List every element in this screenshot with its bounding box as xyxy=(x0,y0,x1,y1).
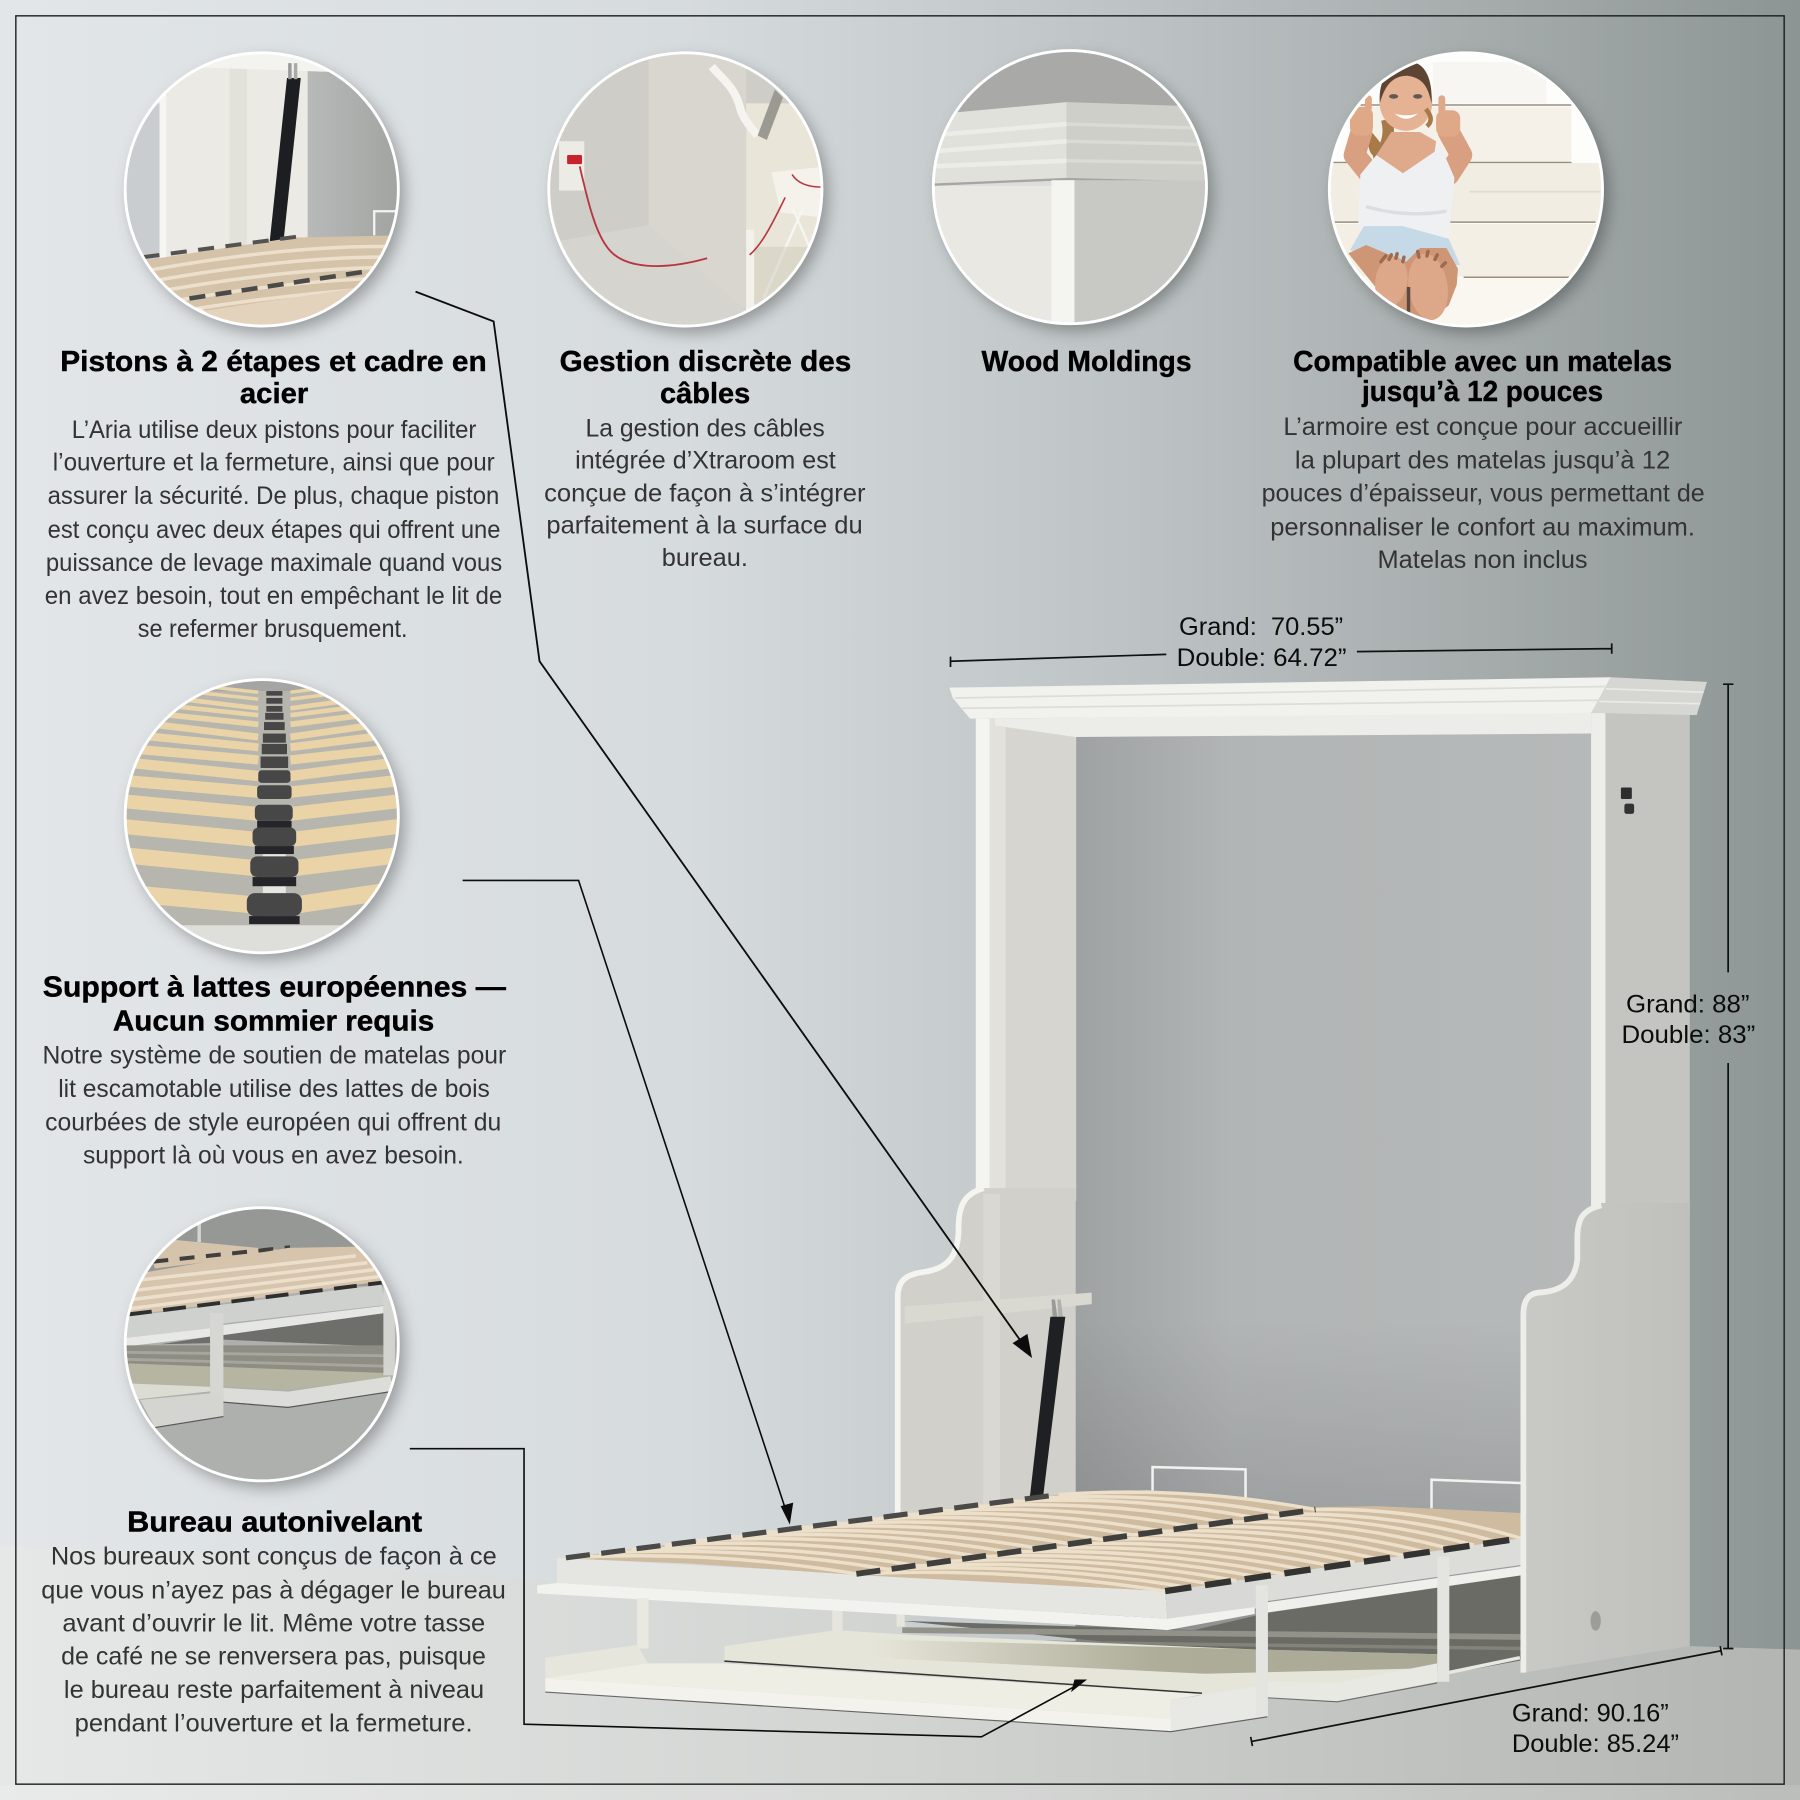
body text: conçue de façon à s’intégrer xyxy=(544,480,866,508)
photo: piston detail xyxy=(121,46,408,333)
heading: Wood Moldings xyxy=(982,346,1192,378)
dimension: depth: Grand: 90.16” xyxy=(1512,1700,1669,1728)
body text: lit escamotable utilise des lattes de bois xyxy=(58,1075,490,1103)
heading xyxy=(560,346,851,410)
dimension: width xyxy=(951,613,1612,672)
body text: L’Aria utilise deux pistons pour faciliter xyxy=(72,416,476,444)
arrow: slats callout xyxy=(463,880,793,1524)
body text: bureau. xyxy=(662,544,748,572)
body text: intégrée d’Xtraroom est xyxy=(575,446,836,474)
heading: Support à lattes européennes — xyxy=(43,971,506,1003)
body text: assurer la sécurité. De plus, chaque piston xyxy=(48,482,499,510)
body text: avant d’ouvrir le lit. Même votre tasse xyxy=(62,1610,485,1638)
heading xyxy=(43,971,506,1037)
heading: Compatible avec un matelas xyxy=(1293,346,1672,378)
heading: jusqu’à 12 pouces xyxy=(1361,376,1603,408)
piston xyxy=(1030,1299,1065,1498)
panel: cable management xyxy=(544,46,866,572)
body text: que vous n’ayez pas à dégager le bureau xyxy=(41,1577,506,1605)
body text: se refermer brusquement. xyxy=(138,615,408,643)
body text: puissance de levage maximale quand vous xyxy=(46,549,502,577)
panel: european slats xyxy=(42,677,506,1169)
panel: mattress compatibility xyxy=(1262,46,1705,574)
dimension: height: Grand: 88” xyxy=(1626,991,1749,1019)
photo: slats detail xyxy=(121,677,408,959)
body text xyxy=(42,1041,506,1169)
heading: câbles xyxy=(660,378,750,410)
dimension: height xyxy=(1621,684,1755,1648)
body text: La gestion des câbles xyxy=(585,415,825,443)
body text: le bureau reste parfaitement à niveau xyxy=(64,1676,484,1704)
desk tray and uprights xyxy=(545,1557,1449,1732)
photo: molding detail xyxy=(930,46,1212,329)
photo: woman on mattresses xyxy=(1326,46,1607,333)
heading: Gestion discrète des xyxy=(560,346,851,378)
cornice xyxy=(949,677,1707,737)
cabinet right side xyxy=(1523,713,1690,1673)
body text xyxy=(45,416,502,643)
panel: self-leveling desk xyxy=(41,1205,506,1738)
body text: personnaliser le confort au maximum. xyxy=(1270,514,1695,542)
body text: de café ne se renversera pas, puisque xyxy=(61,1643,486,1671)
heading: Pistons à 2 étapes et cadre en xyxy=(60,346,487,378)
body text xyxy=(41,1542,506,1738)
bed rail xyxy=(537,1537,1523,1630)
photo: desk detail xyxy=(121,1205,408,1487)
dimension: depth: Double: 85.24” xyxy=(1512,1730,1679,1758)
heading: acier xyxy=(240,378,308,410)
heading xyxy=(1293,346,1672,408)
body text: Nos bureaux sont conçus de façon à ce xyxy=(51,1542,497,1570)
heading xyxy=(60,346,487,410)
panel: pistons xyxy=(45,46,502,643)
illustration: wall bed xyxy=(537,677,1707,1732)
body text: en avez besoin, tout en empêchant le lit de xyxy=(45,582,502,610)
desk top xyxy=(724,1611,1520,1702)
heading: Aucun sommier requis xyxy=(113,1005,434,1037)
body text: Notre système de soutien de matelas pour xyxy=(42,1041,506,1069)
dimension: height: Double: 83” xyxy=(1621,1021,1755,1049)
underside of bed xyxy=(902,1575,1523,1674)
bed support frames xyxy=(1153,1467,1523,1508)
body text xyxy=(544,415,866,572)
photo: cable detail xyxy=(545,46,832,333)
cabinet left side xyxy=(898,719,1092,1518)
lock xyxy=(1621,788,1634,814)
body text: pouces d’épaisseur, vous permettant de xyxy=(1262,480,1705,508)
heading: Bureau autonivelant xyxy=(127,1506,423,1538)
body text: la plupart des matelas jusqu’à 12 xyxy=(1295,446,1670,474)
arrow: piston callout xyxy=(416,292,1032,1358)
body text: support là où vous en avez besoin. xyxy=(83,1141,464,1169)
dimension: width: Grand: 70.55” xyxy=(1179,613,1343,641)
cabinet recess xyxy=(1076,730,1593,1660)
dimension: depth xyxy=(1251,1646,1722,1758)
body text: l’ouverture et la fermeture, ainsi que pour xyxy=(53,449,495,477)
body text: est conçu avec deux étapes qui offrent une xyxy=(48,516,501,544)
body text: L’armoire est conçue pour accueillir xyxy=(1283,413,1682,441)
panel: wood moldings xyxy=(930,46,1212,378)
body text: Matelas non inclus xyxy=(1378,546,1588,574)
body text: pendant l’ouverture et la fermeture. xyxy=(75,1710,473,1738)
body text: courbées de style européen qui offrent du xyxy=(45,1109,501,1137)
dimension: width: Double: 64.72” xyxy=(1177,644,1347,672)
body text xyxy=(1262,413,1705,574)
body text: parfaitement à la surface du xyxy=(546,511,863,539)
arrow: desk callout xyxy=(410,1449,1087,1737)
slats xyxy=(566,1490,1521,1591)
